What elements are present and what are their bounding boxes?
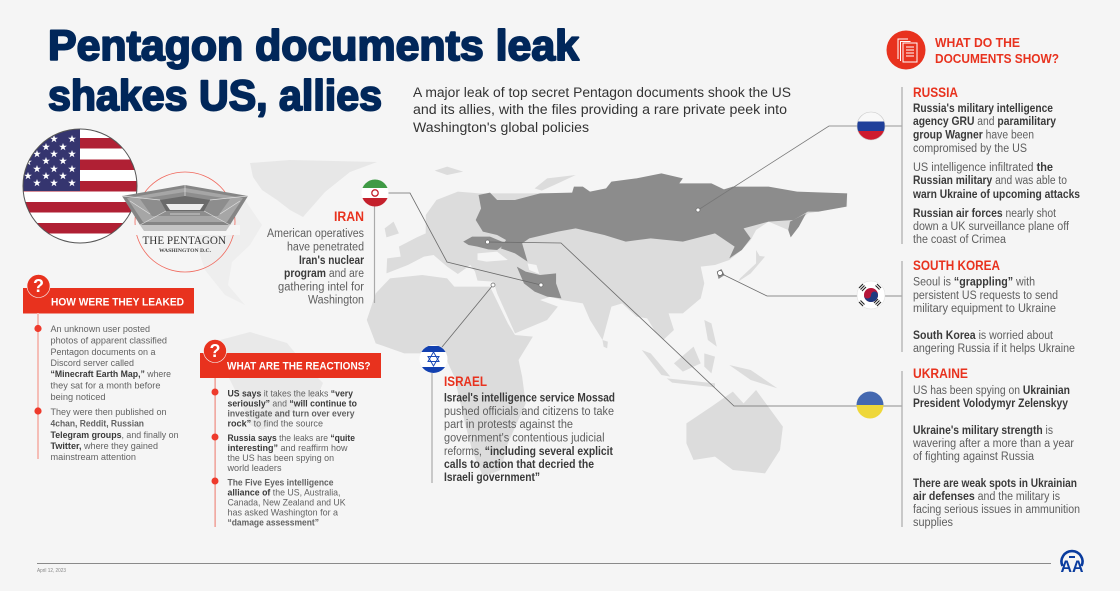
text [50,324,178,463]
map: Ukraine [463,237,506,250]
text: Israel: ISRAEL [444,374,487,389]
panel: Russia: compromised by the US [913,143,1027,155]
panel: South Korea [913,258,1075,355]
flag: Israel [419,345,448,373]
panel: Russia [912,85,1080,246]
text: Israel: reforms, “including several explicit [444,446,613,458]
text: Iran: Iran's nuclear [299,255,364,267]
world map [195,160,847,477]
text: they sat for a month before [50,380,160,392]
text: Iran [267,209,364,306]
panel: Ukraine: of fighting against Russia [913,451,1035,463]
Pentagon emblem: WASHINGTON D.C. [159,248,212,254]
panel: Russia: down a UK surveillance plane off [913,221,1070,233]
map: Greenland and the Americas [195,160,377,430]
text: alliance of the US, Australia, [228,488,340,498]
text: 4chan, Reddit, Russian [50,418,144,430]
date: April 12, 2023 [37,568,66,574]
heading: what do the documents show: DOCUMENTS SHOW? [935,51,1059,66]
text: Israel [444,374,615,484]
panel: how were they leaked [23,274,194,463]
text: Iran: program and are [284,268,364,280]
map: islands and Australia [385,167,783,473]
panel: Russia: Russian air forces nearly shot [913,208,1057,220]
text: The Five Eyes intelligence [228,478,334,488]
panel: Ukraine: wavering after a more than a year [912,438,1074,450]
map: South Korea [717,269,725,279]
banner: HOW WERE THEY LEAKED [51,296,184,308]
title [48,22,579,120]
panel: South Korea: SOUTH KOREA [913,258,1000,273]
panel: Ukraine: air defenses and the military is [913,491,1060,503]
panel: South Korea: angering Russia if it helps Ukraine [913,343,1075,355]
panel: Ukraine: There are weak spots in Ukrainian [913,478,1077,490]
text: Canada, New Zealand and UK [228,498,346,508]
timeline [212,378,218,527]
Pentagon emblem: THE PENTAGON [142,233,226,247]
panel: South Korea: military equipment to Ukraine [913,303,1056,315]
text: Israel: part in protests against the [444,419,573,431]
footer rule [37,563,1051,564]
panel: Russia: warn Ukraine of upcoming attacks [912,189,1080,201]
flag: Russia [857,112,885,140]
text: Israel: Israeli government” [444,472,540,484]
panel: Russia: US intelligence infiltrated the [913,162,1053,174]
text: being noticed [50,392,106,403]
text: Discord server called [50,358,134,369]
text: Iran: IRAN [334,209,364,224]
map: Africa [367,275,533,477]
icon: Anadolu Agency logo: AA [1060,557,1084,576]
panel: South Korea: persistent US requests to send [913,290,1058,302]
panel: South Korea: Seoul is “grappling” with [913,276,1035,288]
banner: ? [210,341,220,361]
text: Russia says the leaks are “quite [228,433,355,443]
flag: Iran [361,179,389,207]
banner: WHAT ARE THE REACTIONS? [227,360,370,372]
flag: Ukraine [856,391,884,419]
panel: Russia: RUSSIA [913,85,958,100]
text: They were then published on [50,407,166,418]
text [227,388,357,528]
banner [200,340,381,378]
map: Russia [476,173,847,262]
text: mainstream attention [50,452,136,463]
flag: United States [22,128,138,244]
timeline [34,313,42,459]
panel: Russia: group Wagner have been [913,130,1034,142]
panel: Ukraine [912,366,1080,529]
text: Israel: calls to action that decried the [444,459,594,471]
text: the US has been spying on [228,453,334,463]
panel: what are the reactions [200,340,381,528]
panel rules [374,87,902,527]
map pins [486,208,722,287]
title: shakes US, allies [48,72,382,120]
panel: Ukraine: President Volodymyr Zelenskyy [913,398,1069,410]
pentagon building [122,185,248,231]
text: “Minecraft Earth Map,” where [50,369,171,380]
panel: Russia: Russian military and was able to [913,175,1067,187]
text: Pentagon documents on a [50,347,156,358]
flag: South Korea [857,281,885,309]
Pentagon emblem [122,172,248,272]
text: rock” to find the source [228,418,323,428]
text: Iran: gathering intel for [278,282,364,294]
map: seas [477,252,539,274]
text: investigate and turn over every [228,408,355,418]
intro text: Washington's global policies [413,120,589,135]
panel: Ukraine: facing serious issues in ammunition [913,504,1080,516]
map: Iran [517,267,561,298]
intro text: A major leak of top secret Pentagon documents shook the US [413,85,791,100]
panel: Ukraine: US has been spying on Ukrainian [913,385,1070,397]
heading: what do the documents show: WHAT DO THE [935,35,1020,50]
banner [23,274,194,314]
panel: Ukraine: Ukraine's military strength is [913,425,1053,437]
panel: South Korea: South Korea is worried about [913,330,1054,342]
text: seriously” and “will continue to [228,398,357,408]
text: Israel: government's contentious judicial [444,432,604,444]
icon: documents [886,30,926,70]
text: Israel: pushed officials and citizens to take [444,406,614,418]
text: Iran: have penetrated [287,242,364,254]
panel: Russia: Russia's military intelligence [913,103,1053,115]
panel: Ukraine: supplies [913,517,953,529]
text: “damage assessment” [228,518,319,528]
leader lines [375,126,902,406]
text: Israel: Israel's intelligence service Mossad [444,392,615,404]
panel: Ukraine: UKRAINE [913,366,968,381]
banner: ? [33,276,44,296]
intro text [413,85,791,135]
map: Eurasia [386,192,847,340]
text: has asked Washington for a [228,508,339,518]
text: Iran: American operatives [267,228,364,240]
text: US says it takes the leaks “very [228,388,354,398]
intro text: and its allies, with the files providing a rare private peek into [413,102,787,117]
panel: Russia: the coast of Crimea [913,234,1007,246]
text: Iran: Washington [308,294,364,306]
heading: what do the documents show [935,35,1059,66]
text: Twitter, where they gained [50,441,158,452]
title: Pentagon documents leak [48,22,579,70]
text: An unknown user posted [50,324,150,335]
text: interesting” and reaffirm how [228,443,348,453]
text: Telegram groups, and finally on [50,430,178,441]
text: photos of apparent classified [50,336,167,346]
panel: Russia: agency GRU and paramilitary [913,116,1057,128]
text: world leaders [227,463,282,473]
